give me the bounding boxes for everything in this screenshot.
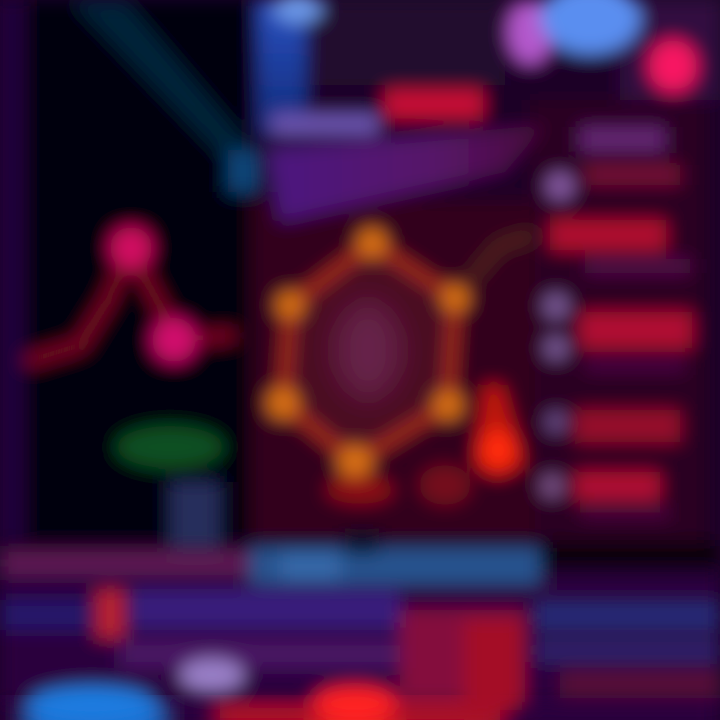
list item 2 bbox=[543, 293, 692, 370]
line chart bbox=[25, 227, 235, 362]
bottom edge backdrop bbox=[0, 695, 720, 720]
bottom centre glow bbox=[220, 620, 522, 720]
hexagon nodes bbox=[267, 228, 469, 479]
panel: top centre bbox=[228, 0, 505, 192]
hexagon core bbox=[334, 300, 402, 400]
chart node bbox=[152, 318, 196, 362]
list item 4 bbox=[540, 472, 670, 518]
panel: right column background bbox=[250, 100, 720, 585]
list item 3 bbox=[545, 410, 680, 442]
panel: left dark area bbox=[0, 0, 250, 540]
list heading bbox=[580, 127, 665, 151]
bottom panel bbox=[0, 552, 720, 702]
hexagon diagram bbox=[267, 228, 469, 479]
icon: plant bbox=[116, 426, 224, 548]
right column list bbox=[540, 127, 692, 518]
hexagon ring bbox=[283, 243, 455, 462]
icon: flame bbox=[326, 385, 524, 505]
header panel band bbox=[268, 125, 545, 222]
top right planet icon bbox=[508, 0, 720, 100]
connector arrow bbox=[470, 235, 535, 280]
bottom left icon bbox=[30, 659, 244, 720]
hexagon interior bbox=[283, 243, 455, 462]
chart node bbox=[110, 227, 152, 269]
bottom icon: marker bbox=[96, 590, 124, 638]
blue banner bbox=[250, 530, 540, 584]
title bbox=[272, 90, 483, 134]
list item 1 bbox=[546, 165, 690, 274]
